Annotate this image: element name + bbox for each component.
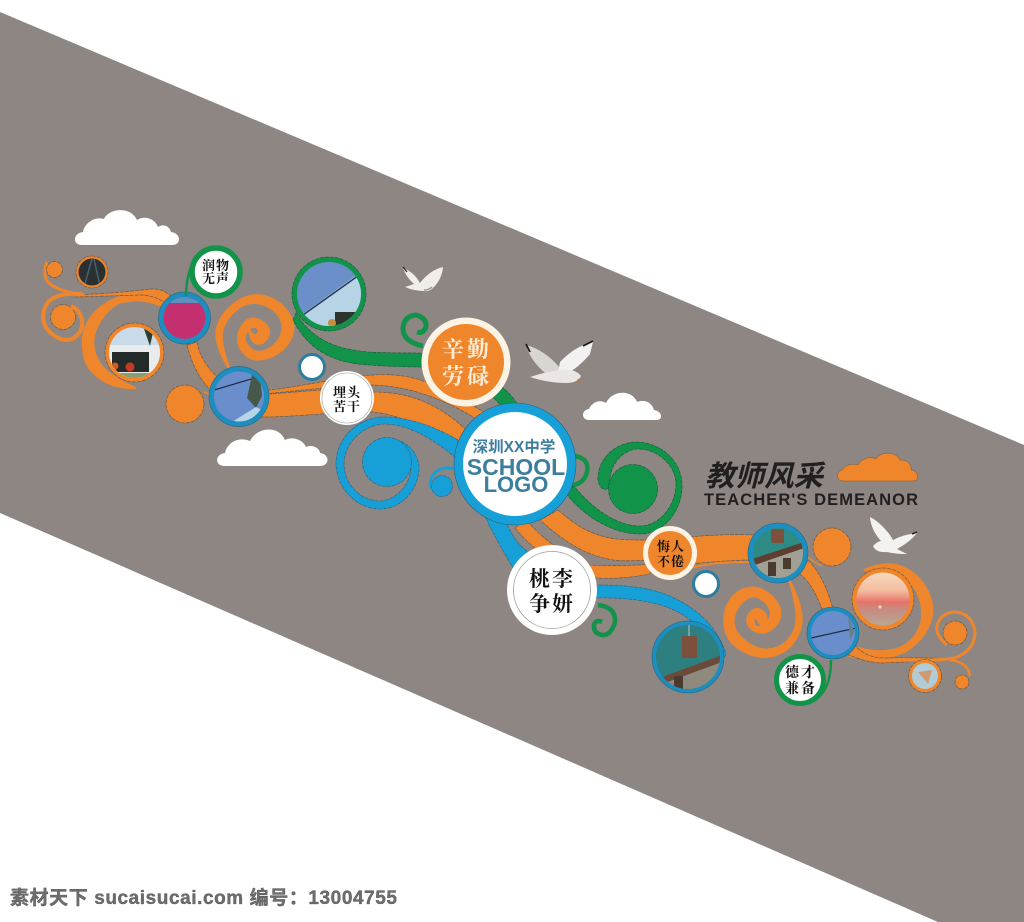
green swirl ring — [566, 442, 682, 534]
blue swirl ring — [336, 417, 458, 509]
badge: 辛勤劳碌: 辛勤 — [442, 337, 492, 362]
badge: 德才兼备: 兼备 — [785, 680, 817, 697]
dark ring photo — [76, 256, 108, 288]
orange blob — [166, 385, 204, 423]
badge: 悔人不倦: 悔人 — [657, 539, 685, 554]
band: main — [258, 390, 475, 450]
beak — [578, 379, 580, 383]
right spiral blob — [943, 621, 967, 645]
badge: 桃李争妍: 桃李 — [529, 567, 575, 591]
blue swirl blob — [362, 438, 412, 486]
sunset photo — [852, 568, 914, 630]
panel: green swirl right — [566, 442, 682, 534]
panel: right orange swirls — [724, 565, 975, 692]
near wing — [557, 342, 593, 378]
cloud: top left — [75, 210, 179, 245]
orange bands centre-right — [515, 510, 851, 609]
photo ring: school board — [105, 323, 164, 382]
green tail — [186, 254, 200, 296]
curl end blob — [46, 262, 62, 278]
band: lower right — [515, 520, 650, 578]
long tapered curl band — [75, 289, 172, 305]
small white circle left — [300, 354, 324, 380]
badge: 润物无声: 润物 — [202, 258, 230, 273]
blue band to lower photo — [594, 585, 726, 662]
small green curl — [403, 315, 426, 346]
badge: 润物无声: 无声 — [202, 271, 230, 286]
bird: right gull — [870, 517, 917, 554]
connector to right circle — [800, 560, 833, 609]
cloud: orange title cloud — [838, 453, 918, 481]
badge: 埋头苦干: 苦干 — [333, 399, 361, 414]
band: thin upper — [262, 375, 484, 418]
badge: 润物无声 — [186, 248, 240, 296]
green tail — [812, 660, 831, 702]
blue connector from logo — [486, 518, 528, 568]
right spiral — [217, 295, 293, 370]
left spiral right — [724, 582, 801, 657]
logo circle: LOGO — [484, 472, 548, 497]
panel: blue swirl — [336, 417, 458, 509]
green connector — [488, 383, 522, 412]
badge: 埋头苦干 — [320, 371, 374, 425]
school logo text: SCHOOL — [467, 454, 565, 480]
curl to end blob — [950, 660, 970, 676]
tapered base wedge — [847, 645, 952, 663]
green swirl blob — [608, 464, 658, 514]
watermark: 素材天下 sucaisucai.com 编号：13004755 — [10, 886, 397, 909]
photo: green ring circle — [292, 257, 366, 331]
orange bands centre-left — [258, 375, 484, 450]
orange blob — [813, 528, 851, 566]
green swirl small curl — [572, 456, 588, 485]
pink photo circle connector — [187, 342, 220, 392]
blue tail and band — [486, 518, 726, 662]
badge: 德才兼备: 德才 — [785, 664, 817, 681]
cloud: centre — [583, 393, 661, 420]
right spiral ring — [900, 612, 975, 660]
blue ring circle: sky photo right — [807, 607, 859, 659]
school name: 深圳XX中学 — [473, 437, 555, 456]
far wing — [526, 345, 560, 380]
cloud: lower left — [217, 430, 328, 466]
badge: 埋头苦干: 埋头 — [333, 385, 361, 400]
photo: lower blue circle — [652, 621, 724, 693]
green swirl upper — [293, 313, 522, 412]
left spiral blob — [50, 304, 76, 330]
end blob — [955, 675, 969, 689]
photo: upper blue circle right — [748, 523, 808, 583]
band: beyond badge — [690, 535, 755, 564]
bird: large gull — [526, 341, 593, 383]
subtitle: teacher's demeanor: TEACHER'S DEMEANOR — [704, 491, 918, 509]
large swirl around sunset — [850, 565, 932, 658]
badge: 辛勤劳碌: 劳碌 — [442, 364, 492, 389]
badge: 德才兼备 — [776, 656, 831, 704]
logo circle — [454, 403, 576, 525]
band: main right — [540, 510, 650, 561]
bird: small gull — [403, 267, 443, 291]
thin curl line — [45, 262, 84, 295]
title: 教师风采: 教师风采 — [705, 461, 826, 493]
badge: 桃李争妍: 争妍 — [529, 592, 575, 616]
blue ring circle: sky and palm photo — [209, 366, 269, 426]
large left swirl — [83, 294, 170, 388]
green tail — [293, 313, 430, 367]
small blue curl — [430, 468, 458, 496]
small green curl lower — [594, 605, 615, 635]
blue ring circle: pink photo — [158, 292, 210, 344]
badge: 桃李争妍 — [507, 545, 597, 635]
left spiral ring — [43, 294, 82, 340]
small white circle right — [694, 572, 718, 596]
panel: left orange swirl group — [43, 256, 293, 423]
badge: 悔人不倦 — [643, 526, 697, 580]
badge: 辛勤劳碌 — [422, 318, 510, 406]
body — [530, 370, 581, 383]
small ring photo — [908, 660, 942, 692]
badge: 悔人不倦: 不倦 — [657, 554, 685, 569]
